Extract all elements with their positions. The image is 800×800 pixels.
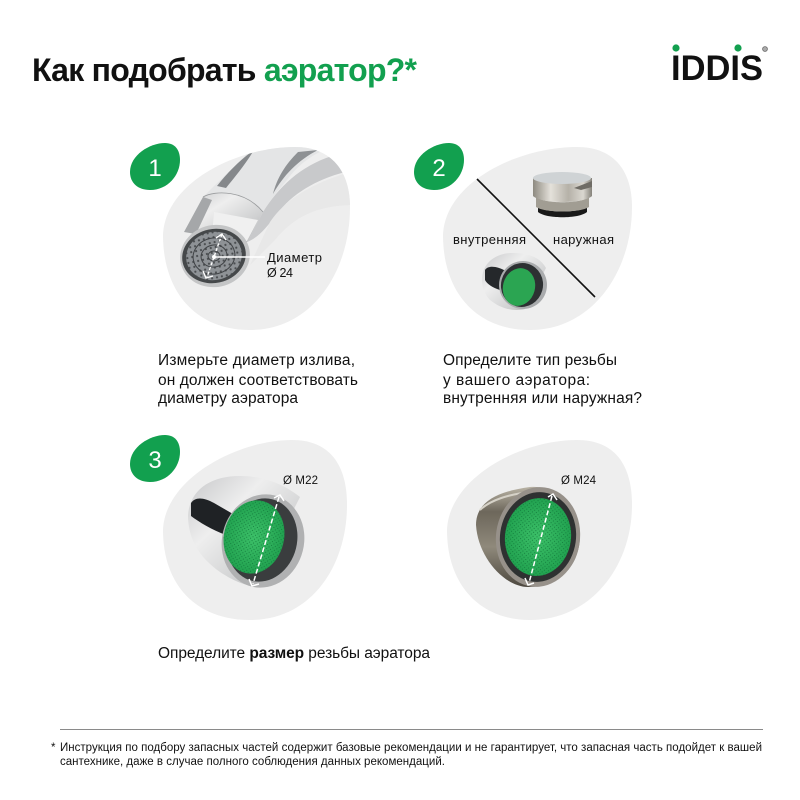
badge 1 — [130, 143, 180, 190]
badge 2: 2 — [432, 155, 446, 182]
image blob: M24 — [447, 440, 632, 620]
text: step 2: Определите тип резьбы — [443, 352, 617, 369]
panel: step 2 thread type — [443, 147, 632, 330]
badge 2 — [414, 143, 464, 190]
image blob: faucet — [163, 147, 350, 330]
footnote: сантехнике, даже в случае полного соблюдения данных рекомендаций. — [60, 756, 445, 768]
label M24: Ø M24 — [561, 475, 597, 487]
label: internal: внутренняя — [453, 232, 526, 247]
panel: step 3 M22 — [163, 440, 347, 620]
image blob: M22 — [163, 440, 347, 620]
diameter label: Диаметр — [267, 250, 322, 265]
panel: step 1 measure the spout: Ø 24 — [267, 266, 293, 280]
badge 1: 1 — [148, 155, 162, 182]
text: step 2: у вашего аэратора: — [443, 372, 590, 389]
panel: step 3 M24 — [447, 440, 632, 620]
divider line — [477, 179, 595, 297]
image blob: thread types — [443, 147, 632, 330]
text: step 2: внутренняя или наружная? — [443, 390, 642, 407]
badge 3: 3 — [148, 447, 162, 474]
footnote: Инструкция по подбору запасных частей содержит базовые рекомендации и не гарантирует, что запасная часть подойдет к вашей — [60, 742, 762, 754]
text: step 1: диаметру аэратора — [158, 390, 298, 407]
badge 3 — [130, 435, 180, 482]
faucet spout — [180, 147, 342, 288]
arrow M24 — [525, 494, 557, 585]
panel: step 1 measure the spout — [163, 145, 355, 330]
aerator with external thread — [533, 172, 592, 217]
text: step 1: Измерьте диаметр излива, — [158, 352, 355, 369]
text: step 3: Определите размер резьбы аэратора — [158, 645, 430, 662]
aerator M24 body — [476, 482, 587, 592]
label M22: Ø M22 — [283, 475, 318, 487]
arrow M22 — [249, 495, 284, 586]
title: Как подобрать аэратор?* — [32, 52, 418, 88]
aerator with internal thread — [482, 253, 552, 314]
logo: IDDIS: IDDIS — [671, 49, 763, 88]
footnote — [51, 730, 763, 768]
label: external: наружная — [553, 232, 614, 247]
footnote: * — [51, 742, 56, 754]
diameter arrow — [203, 234, 265, 278]
aerator M22 body — [188, 476, 314, 597]
text: step 1: он должен соответствовать — [158, 372, 358, 389]
